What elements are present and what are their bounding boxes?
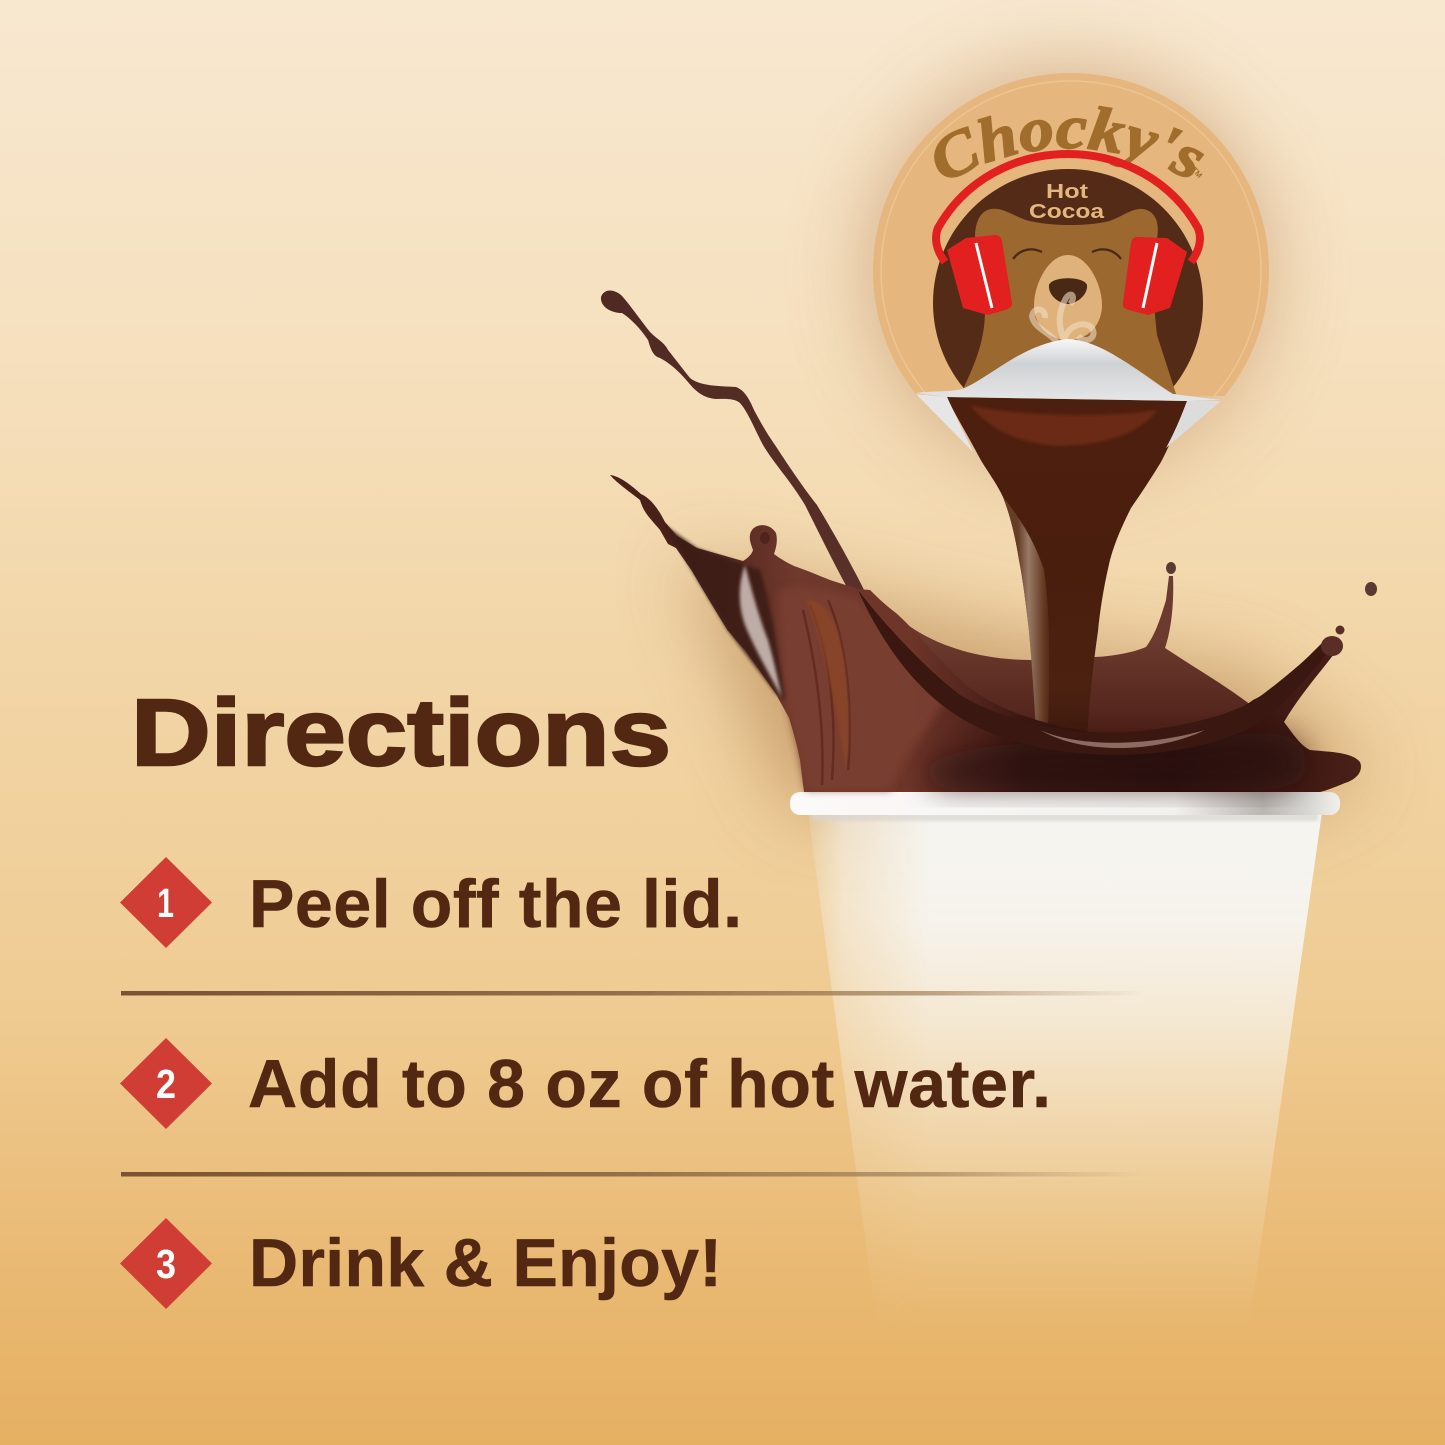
- ridge highlight: [1040, 730, 1205, 748]
- nose: [1049, 278, 1087, 304]
- main crown: [610, 475, 1361, 792]
- back pool: [890, 576, 1255, 760]
- divider 1: [121, 991, 1145, 996]
- brand name: Chocky's: [934, 106, 1204, 178]
- lid disc: [873, 73, 1269, 396]
- chocolate stream: [947, 397, 1187, 740]
- right eye: [1092, 249, 1121, 259]
- dark badge circle: [933, 169, 1203, 392]
- crown lighter left panel: [778, 588, 950, 790]
- step 2 text: Add to 8 oz of hot water.: [248, 1046, 1051, 1122]
- step 3: [120, 1218, 722, 1309]
- rim droplet small: [1336, 626, 1344, 634]
- crown ridge: [858, 590, 1330, 755]
- right ear cup: [1123, 237, 1187, 315]
- cup rim: [790, 792, 1340, 815]
- dark front shadow: [925, 733, 1308, 790]
- label line hot: Hot: [1046, 181, 1088, 203]
- cup body: [808, 815, 1322, 1284]
- divider 2: [121, 1172, 1145, 1176]
- title: Directions: [131, 680, 671, 786]
- step 3 text: Drink & Enjoy!: [249, 1225, 722, 1301]
- step 1 number: 1: [157, 880, 174, 926]
- tendril droplet: [1166, 562, 1176, 574]
- label line cocoa: Cocoa: [1029, 201, 1105, 223]
- silver left highlight: [740, 565, 782, 698]
- chocolate splash: [601, 290, 1377, 792]
- hot cocoa label: [1029, 181, 1105, 223]
- syrup streaks: [803, 600, 850, 785]
- reddish sheen: [806, 600, 849, 770]
- step 3 number: 3: [156, 1241, 176, 1287]
- stream top sheen: [970, 405, 1158, 446]
- left eye: [1013, 249, 1042, 259]
- peeled cocoa lid: [873, 73, 1269, 506]
- headband: [936, 154, 1200, 262]
- step 2 number: 2: [156, 1061, 176, 1107]
- ring on left crest: [760, 532, 770, 544]
- step 3 badge: [120, 1218, 212, 1309]
- stream highlight: [1003, 497, 1049, 730]
- long tendril: [601, 290, 868, 598]
- foil peel: [915, 339, 1221, 401]
- rim shadow: [812, 813, 1318, 821]
- step 2: [120, 1038, 1051, 1129]
- step 1: [120, 857, 742, 948]
- bear badge: [933, 169, 1203, 394]
- right divider: [1143, 243, 1157, 308]
- rim droplet large: [1321, 636, 1343, 656]
- right foil flap: [1166, 401, 1221, 448]
- left foil flap: [916, 394, 973, 452]
- soft shadow halo behind lid and splash: [680, 63, 1370, 810]
- headphones: [936, 154, 1200, 315]
- step 1 badge: [120, 857, 212, 948]
- paper cup: [790, 792, 1340, 1335]
- dark left edge: [665, 525, 785, 700]
- left divider: [976, 243, 992, 308]
- trademark: TM: [1190, 165, 1204, 180]
- steam swirls: [1032, 295, 1094, 345]
- flying droplet: [1365, 582, 1377, 596]
- snout: [1034, 255, 1102, 340]
- step 1 text: Peel off the lid.: [249, 866, 742, 942]
- left ear cup: [947, 235, 1012, 315]
- bear head and body: [958, 209, 1178, 400]
- step 2 badge: [120, 1038, 212, 1129]
